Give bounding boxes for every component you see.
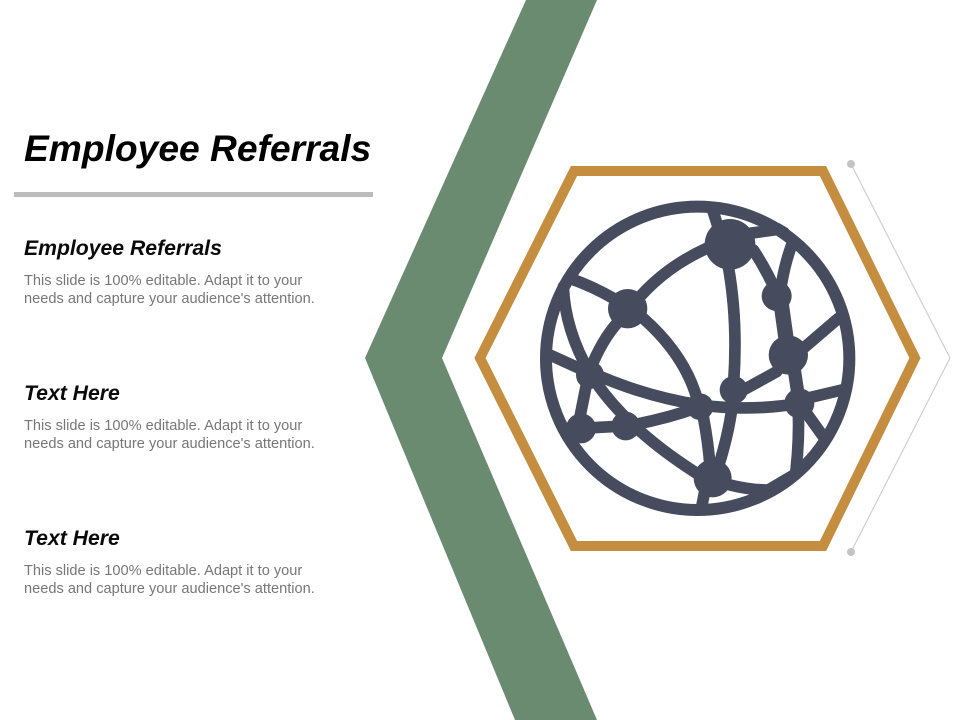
- green chevron: [365, 0, 597, 720]
- text block: text here 1: This slide is 100% editable. Adapt it to your: [24, 418, 302, 434]
- text block: text here 2: This slide is 100% editable. Adapt it to your: [24, 563, 302, 579]
- text block: text here 1: Text Here: [24, 382, 120, 405]
- orange hexagon: [480, 171, 915, 546]
- text block: employee referrals: [24, 237, 315, 307]
- icon: network globe: [546, 207, 849, 510]
- text block: employee referrals: Employee Referrals: [24, 237, 222, 260]
- title divider: [14, 192, 373, 197]
- text block: employee referrals: This slide is 100% editable. Adapt it to your: [24, 273, 302, 289]
- text block: text here 1: needs and capture your audience's attention.: [24, 436, 315, 452]
- text block: text here 2: Text Here: [24, 527, 120, 550]
- thin grey bracket with dots: [847, 160, 950, 556]
- text block: employee referrals: needs and capture your audience's attention.: [24, 291, 315, 307]
- text block: text here 2: [24, 527, 315, 597]
- text block: text here 1: [24, 382, 315, 452]
- title: Employee Referrals: [24, 127, 371, 169]
- text block: text here 2: needs and capture your audience's attention.: [24, 581, 315, 597]
